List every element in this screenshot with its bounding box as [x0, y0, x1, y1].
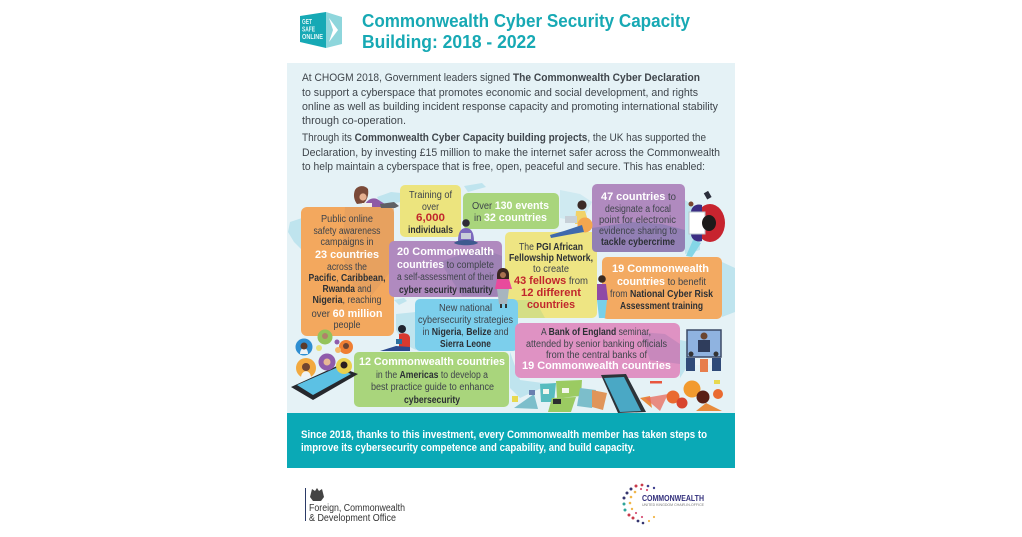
panel: 19 Commonwealth countries risk assessment [602, 257, 722, 319]
panel: 47 countries: tackle cybercrime [601, 237, 675, 248]
panel: 12 Commonwealth countries: in the Americas to develop a [376, 370, 488, 381]
panel: over 130 events: Over 130 events [472, 200, 549, 212]
panel: 19 Commonwealth countries risk assessment: Assessment training [620, 301, 703, 312]
intro text [302, 72, 720, 173]
logo: Get Safe Online cube: GET [302, 19, 313, 26]
panel: public online safety campaigns: Public online [321, 214, 374, 225]
panel: public online safety campaigns: Rwanda and [322, 284, 372, 295]
panel: training of 6,000 individuals: individuals [408, 225, 453, 236]
panel: light blue background [287, 63, 735, 413]
panel: new national strategies: in Nigeria, Belize and [422, 327, 508, 338]
panel: training of 6,000 individuals [400, 185, 461, 237]
panel: Bank of England seminar: attended by senior banking officials [526, 339, 667, 350]
icon: woman lying on orange panel [354, 186, 399, 208]
panel: over 130 events: in 32 countries [474, 212, 547, 224]
panel: training of 6,000 individuals: 6,000 [416, 212, 445, 224]
panel: Bank of England seminar [515, 323, 680, 378]
panel: over 130 events [463, 193, 559, 229]
panel: 19 Commonwealth countries risk assessment: countries to benefit [617, 276, 706, 288]
banner: teal closing statement [287, 413, 735, 468]
intro text: to help maintain a cyberspace that is free, open, peaceful and secure. This has enabled: [302, 161, 705, 173]
panel: PGI African Fellowship Network: countries [527, 299, 575, 311]
panel: 20 Commonwealth countries: a self-assessment of their [397, 272, 495, 283]
panel: public online safety campaigns: across the [327, 262, 367, 273]
panel: 12 Commonwealth countries: 12 Commonwealth countries [359, 356, 505, 368]
logo: Commonwealth UK Chair-in-Office [622, 484, 705, 524]
panel: 12 Commonwealth countries: cybersecurity [404, 395, 460, 406]
panel: public online safety campaigns [301, 207, 394, 336]
panel: public online safety campaigns: Pacific, Caribbean, [308, 273, 386, 284]
panel: 20 Commonwealth countries [389, 241, 502, 297]
panel: 47 countries: point for electronic [599, 215, 676, 226]
illustration: bottom icon strip right [640, 380, 723, 411]
panel: new national strategies: Sierra Leone [440, 339, 491, 350]
logo: Get Safe Online cube: ONLINE [302, 34, 323, 41]
panel: PGI African Fellowship Network: to create [533, 264, 570, 275]
panel: 19 Commonwealth countries risk assessment: 19 Commonwealth [612, 263, 709, 275]
icon: top-down person at desk [686, 191, 725, 257]
panel: 20 Commonwealth countries: countries to complete [397, 259, 495, 271]
panel: training of 6,000 individuals: Training of [409, 190, 452, 201]
panel: PGI African Fellowship Network: The PGI African [519, 242, 583, 253]
panel: public online safety campaigns: campaigns in [320, 237, 374, 248]
icon: standing woman in pink [495, 268, 512, 308]
intro text: Through its Commonwealth Cyber Capacity building projects, the UK has supported the [302, 132, 706, 144]
panel: 20 Commonwealth countries: 20 Commonwealth [397, 246, 494, 258]
illustration: bottom icon strip left [512, 380, 607, 412]
logo: Foreign, Commonwealth & Development Office: Foreign, Commonwealth [309, 503, 405, 514]
icon: board meeting with presenter [686, 330, 721, 372]
intro text: through co-operation. [302, 115, 406, 127]
panel: public online safety campaigns: safety awareness [314, 226, 381, 237]
panel: PGI African Fellowship Network: 43 fellows from [514, 275, 588, 287]
logo: Get Safe Online cube [300, 12, 342, 48]
panel: 20 Commonwealth countries: cyber security maturity [399, 285, 493, 296]
banner: teal closing statement: Since 2018, thanks to this investment, every Commonwealth member has taken steps to [301, 429, 707, 441]
panel: PGI African Fellowship Network [505, 232, 597, 318]
panel: 19 Commonwealth countries risk assessment: from National Cyber Risk [610, 289, 713, 300]
panel: new national strategies [415, 299, 518, 351]
logo: Commonwealth UK Chair-in-Office: COMMONWEALTH [642, 494, 704, 503]
panel: public online safety campaigns: 23 countries [315, 249, 379, 261]
panel: new national strategies: cybersecurity strategies [418, 315, 513, 326]
panel: 47 countries: evidence sharing to [599, 226, 678, 237]
panel: Bank of England seminar: from the central banks of [546, 350, 647, 361]
illustration: large smartphone [601, 374, 646, 413]
panel: 12 Commonwealth countries [354, 352, 509, 407]
logo: Foreign, Commonwealth & Development Office: & Development Office [309, 513, 396, 524]
title: Commonwealth Cyber Security Capacity [362, 11, 690, 31]
icon: standing man in purple [597, 275, 608, 318]
intro text: Declaration, by investing £15 million to make the internet safer across the Commonwealth [302, 147, 720, 159]
panel: Bank of England seminar: A Bank of England seminar, [541, 327, 651, 338]
panel: PGI African Fellowship Network: Fellowship Network, [509, 253, 593, 264]
panel: 47 countries [592, 184, 685, 252]
icon: smartphone with avatars [291, 330, 358, 400]
panel: new national strategies: New national [439, 303, 492, 314]
intro text: online as well as building incident response capacity and promoting international stability [302, 101, 719, 113]
panel: public online safety campaigns: over 60 million [312, 308, 383, 320]
logo: Get Safe Online cube: SAFE [302, 26, 315, 34]
intro text: At CHOGM 2018, Government leaders signed The Commonwealth Cyber Declaration [302, 72, 700, 84]
title: Building: 2018 - 2022 [362, 32, 536, 52]
panel: 47 countries: designate a focal [605, 204, 671, 215]
logo: Foreign, Commonwealth & Development Office [305, 488, 405, 524]
icon: man with laptop [454, 219, 478, 245]
world map background [288, 183, 735, 398]
panel: 47 countries: 47 countries to [601, 191, 677, 203]
panel: training of 6,000 individuals: over [422, 202, 440, 213]
intro text: to support a cyberspace that promotes economic and social development, and rights [302, 87, 698, 99]
panel: public online safety campaigns: Nigeria, reaching [312, 295, 382, 306]
logo: Commonwealth UK Chair-in-Office: UNITED KINGDOM CHAIR-IN-OFFICE [642, 503, 705, 507]
panel: 12 Commonwealth countries: best practice guide to enhance [371, 382, 494, 393]
panel: Bank of England seminar: 19 Commonwealth countries [522, 360, 671, 372]
panel: public online safety campaigns: people [334, 320, 361, 331]
banner: teal closing statement: improve its cybersecurity competence and capability, and build capacity. [301, 442, 635, 454]
icon: woman with laptop on beanbag [550, 200, 592, 238]
icon: seated man reading [380, 325, 410, 351]
title [362, 11, 690, 52]
panel: PGI African Fellowship Network: 12 different [521, 287, 581, 299]
